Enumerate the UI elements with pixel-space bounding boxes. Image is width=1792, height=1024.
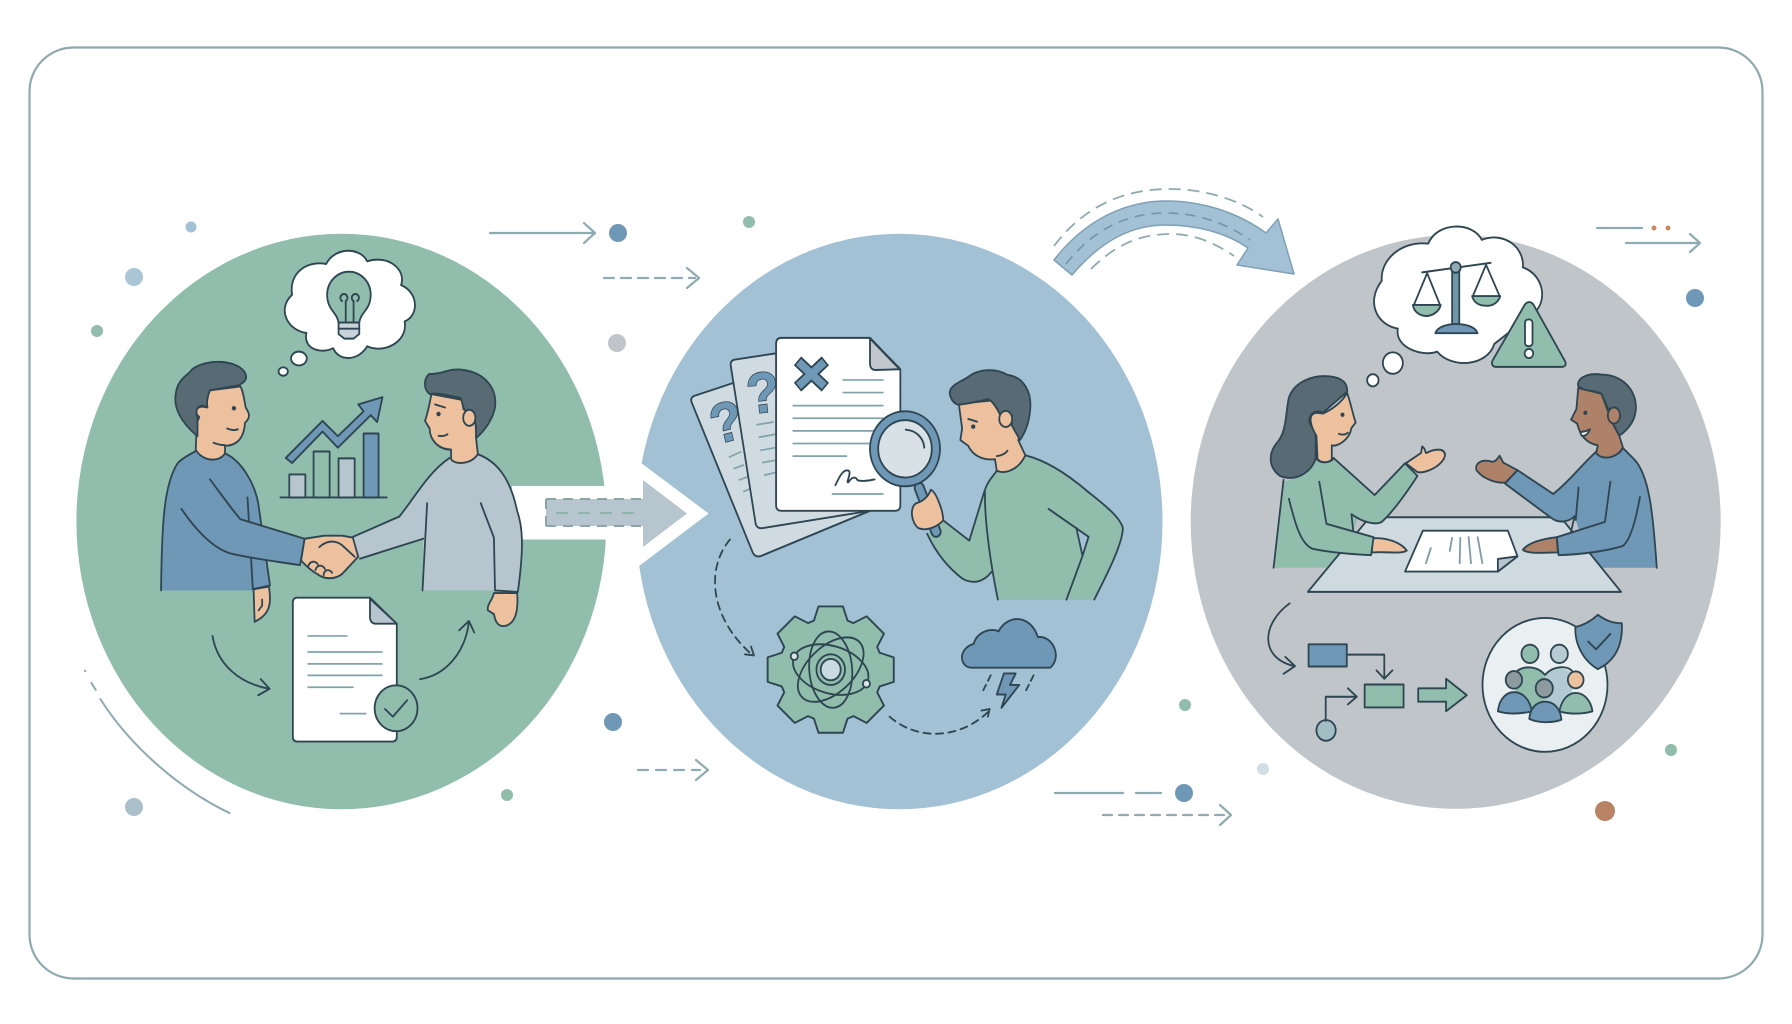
dashed arrow lower right [1103, 814, 1225, 816]
scattered dots [91, 216, 1704, 821]
man's arms and hands [1476, 452, 1640, 555]
bar chart with rising arrow [280, 397, 387, 497]
person: woman in green [1271, 376, 1373, 568]
dashed arrow: documents to gear [715, 540, 754, 655]
table with paper [1308, 517, 1621, 592]
person: right man in grey [353, 369, 522, 626]
thought cloud with light bulb [279, 251, 415, 376]
line segments lower right [1055, 792, 1161, 794]
thin arrow top one [490, 223, 595, 243]
stacked uncertain documents [691, 338, 900, 556]
person: left man in blue [161, 362, 305, 622]
gear with atom [768, 606, 894, 733]
dashed arrow top two [604, 277, 695, 279]
panel: uncertainty and analysis [606, 234, 1162, 809]
grey background circle [1191, 235, 1721, 809]
dash-dot arrow head [696, 760, 708, 780]
magnifying glass in hand [870, 411, 943, 532]
arrow: to document [212, 636, 270, 695]
person: man in blue [1571, 374, 1657, 568]
dashed arrow head top two [687, 268, 699, 288]
blue background circle [636, 234, 1162, 809]
white channel to next panel [512, 486, 619, 540]
arrow: curved block arrow between panels two and three [1054, 189, 1294, 275]
process flow diagram [1268, 603, 1467, 741]
stacked uncertain documents: ? [744, 359, 782, 427]
warning triangle [1492, 302, 1566, 367]
thought cloud with scales [1367, 227, 1542, 386]
woman's arms and hands [1287, 446, 1445, 555]
green background circle [76, 234, 606, 809]
arrow: from document [420, 621, 474, 679]
arrow: straight dashed block arrow between panels one and two [546, 480, 687, 547]
white wedge notch [606, 461, 709, 568]
panel: negotiation and resolution [1191, 227, 1721, 809]
person: analyst in green [927, 370, 1123, 600]
handshake [301, 536, 358, 578]
team circle with shield [1482, 615, 1622, 752]
dashed arrow: gear to storm [890, 709, 990, 734]
line and arrow top right [1597, 228, 1700, 252]
storm cloud with lightning [962, 619, 1056, 708]
stacked uncertain documents: ? [704, 388, 749, 457]
dash-dot arrow lower middle [638, 769, 700, 771]
contract document with check badge [293, 598, 417, 742]
decorative arc bottom left [85, 671, 230, 813]
panel: partnership agreement [76, 234, 619, 813]
dashed arrow head lower right [1220, 805, 1231, 825]
